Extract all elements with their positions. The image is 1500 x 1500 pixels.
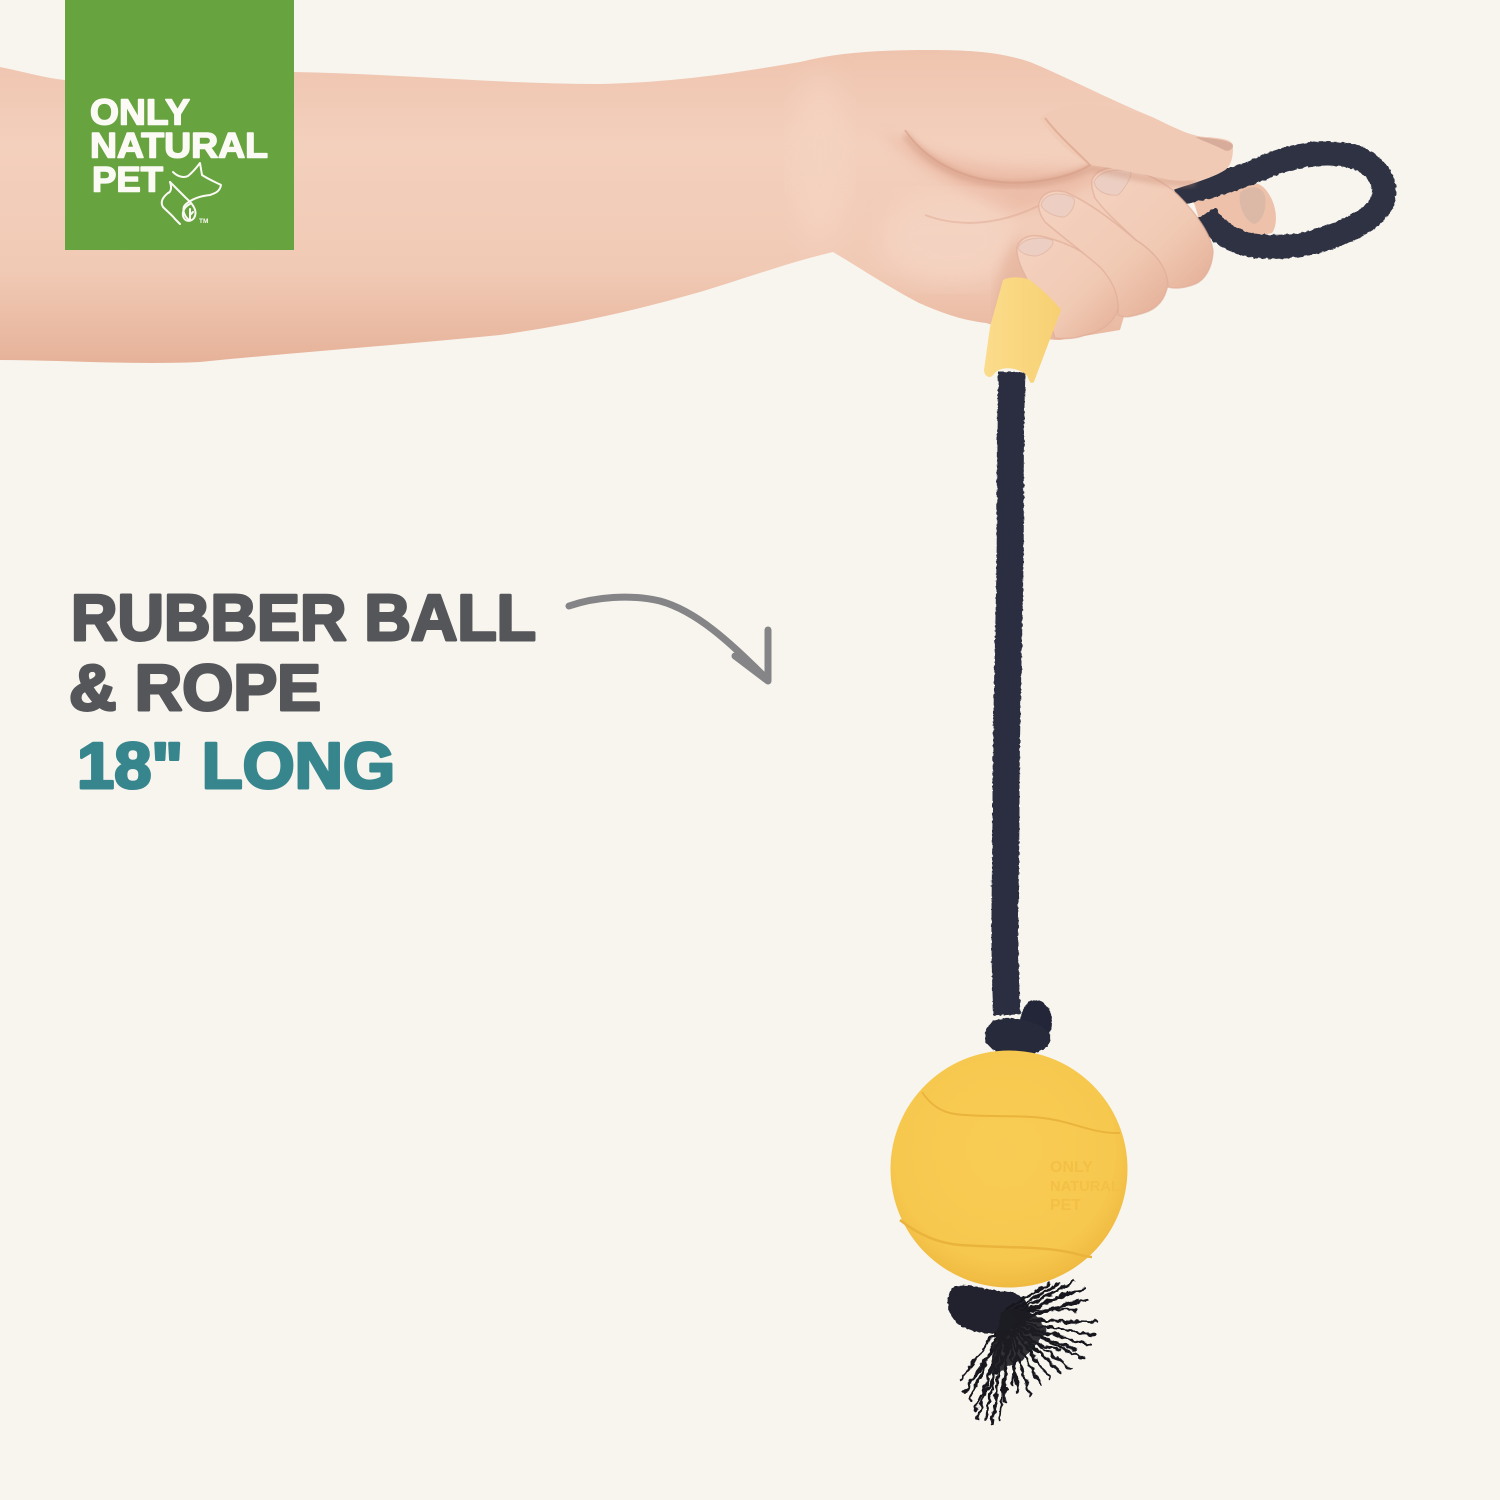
thumb <box>1040 104 1233 181</box>
middle finger <box>1039 191 1168 317</box>
logo wordmark <box>90 92 268 200</box>
logo wordmark: PET <box>92 160 163 200</box>
shadow under thumb <box>905 135 1195 184</box>
logo wordmark: NATURAL <box>90 126 268 166</box>
rope loop <box>1175 153 1384 247</box>
palm crease <box>925 205 1040 223</box>
frayed rope tassel <box>960 1282 1096 1424</box>
photo: arm and hand holding the rope toy <box>0 50 1384 363</box>
embossed ball logo: PET <box>1050 1197 1081 1214</box>
heading: rubber ball and rope: & ROPE <box>69 651 321 724</box>
embossed ball logo: NATURAL <box>1050 1178 1120 1195</box>
heading: rubber ball and rope <box>69 581 536 724</box>
fingernails <box>1018 170 1131 256</box>
yellow rubber ball <box>890 1050 1128 1288</box>
dense tassel core <box>990 1309 1046 1374</box>
callout: 18 inch length: 18" LONG <box>77 729 395 802</box>
yellow cord stopper <box>984 277 1061 383</box>
logo icon: dog, cat and leaf <box>162 163 221 224</box>
index finger <box>1092 168 1213 288</box>
lower ball seam <box>900 1220 1092 1257</box>
thumb nail <box>1195 137 1233 151</box>
embossed ball logo <box>1050 1159 1120 1214</box>
hanging rope <box>1005 372 1012 1015</box>
logo badge <box>65 0 294 250</box>
heading: rubber ball and rope: RUBBER BALL <box>71 581 536 654</box>
logo wordmark: ONLY <box>90 92 190 132</box>
arm and palm <box>0 50 1233 363</box>
arrow pointing to rope <box>569 597 768 681</box>
embossed ball logo: ONLY <box>1050 1159 1093 1176</box>
top rope knot <box>985 1000 1052 1055</box>
thumb crease <box>905 118 1090 183</box>
fingernail on back finger <box>1240 187 1265 224</box>
logo trademark: TM <box>199 218 208 225</box>
upper ball seam <box>922 1092 1120 1133</box>
bottom rope knot <box>948 1285 1029 1333</box>
palm and wrist shading <box>819 98 1099 300</box>
ring finger <box>1017 236 1119 339</box>
back finger inside the rope loop <box>1190 180 1276 239</box>
